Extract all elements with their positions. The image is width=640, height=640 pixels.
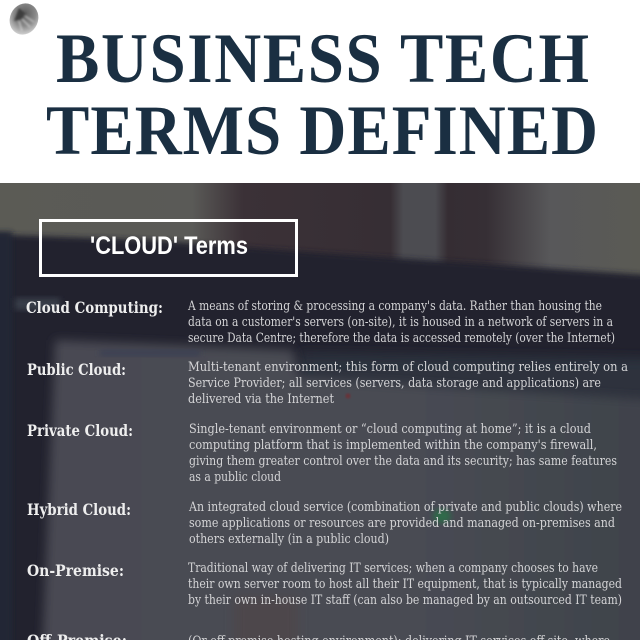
title xyxy=(46,18,598,170)
heading box: CLOUD terms xyxy=(40,220,296,276)
term: Off-Premise xyxy=(27,631,610,640)
term: Public Cloud xyxy=(27,359,628,406)
title: TERMS DEFINED xyxy=(46,90,598,170)
term: Public Cloud: Public Cloud: xyxy=(27,360,126,379)
title: BUSINESS TECH xyxy=(56,18,589,98)
term: Private Cloud xyxy=(27,421,617,484)
term: Hybrid Cloud xyxy=(27,499,622,546)
term: Private Cloud: Private Cloud: xyxy=(27,421,133,440)
background photo: blurred monitor xyxy=(0,183,640,640)
logo: shell emblem xyxy=(5,0,43,39)
term: Cloud Computing xyxy=(26,298,615,345)
term: Private Cloud: computing platform that is implemented within the company's firewall, xyxy=(189,437,597,452)
term: Private Cloud: as a public cloud xyxy=(189,469,281,484)
heading box: CLOUD terms: 'CLOUD' Terms xyxy=(90,232,248,260)
term: Hybrid Cloud: Hybrid Cloud: xyxy=(27,500,131,519)
term: On-Premise xyxy=(27,560,622,607)
term: On-Premise: On-Premise: xyxy=(27,561,124,580)
term: Private Cloud: Single-tenant environment or “cloud computing at home”; it is a cloud xyxy=(189,421,591,436)
term: Public Cloud: delivered via the Internet xyxy=(188,391,334,406)
term: Cloud Computing: Cloud Computing: xyxy=(26,298,163,317)
term: Hybrid Cloud: others externally (in a public cloud) xyxy=(189,531,389,546)
